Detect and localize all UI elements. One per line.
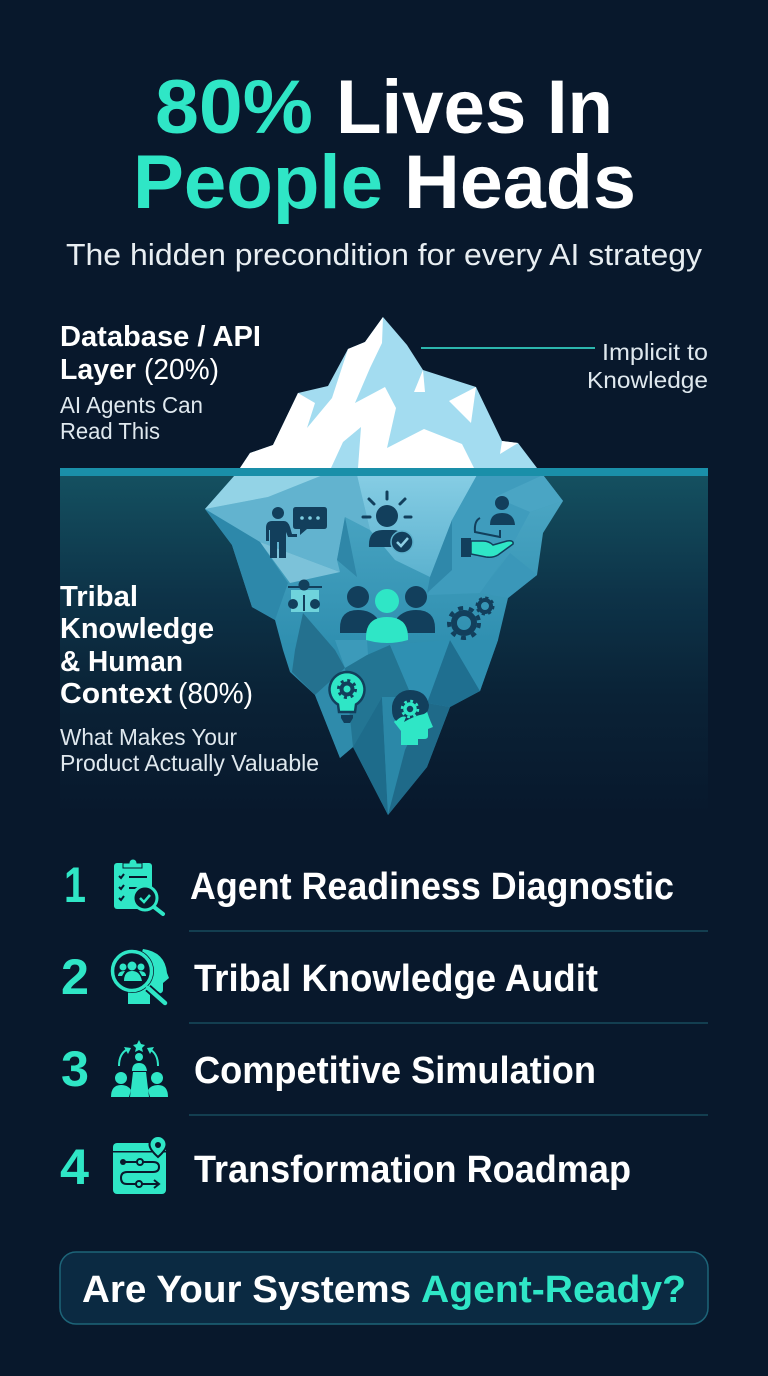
call to action: Are Your Systems	[82, 1269, 411, 1311]
icon: hand with person	[461, 496, 515, 557]
icon: people with star and arrows	[111, 1040, 168, 1097]
label: database / API layer: (20%)	[144, 354, 219, 386]
label: tribal knowledge: Context	[60, 678, 172, 710]
title: Lives In	[336, 65, 613, 150]
step 4: transformation roadmap	[60, 1136, 631, 1195]
label: database / API layer: Database / API	[60, 321, 261, 353]
iceberg above water	[240, 317, 537, 468]
callout: implicit to knowledge	[421, 339, 708, 393]
label: database / API layer	[60, 321, 261, 444]
step 2: tribal knowledge audit: 2	[61, 949, 89, 1005]
title: Heads	[404, 140, 636, 225]
step 4: transformation roadmap: 4	[60, 1139, 89, 1195]
waterline	[60, 468, 708, 476]
icon: person with speech bubble	[266, 507, 327, 558]
callout: implicit to knowledge: Knowledge	[587, 367, 708, 393]
step 3: competitive simulation: Competitive Simulation	[194, 1050, 596, 1092]
label: tribal knowledge: Tribal	[60, 581, 138, 613]
icon: clipboard with magnifier	[114, 859, 163, 914]
icon: small emblem	[288, 580, 322, 612]
iceberg below water	[205, 475, 563, 815]
label: tribal knowledge: & Human	[60, 646, 183, 678]
step 2: tribal knowledge audit	[61, 949, 598, 1005]
step 1: agent readiness diagnostic	[64, 857, 674, 914]
title: 80%	[155, 65, 313, 150]
label: tribal knowledge: Knowledge	[60, 613, 214, 645]
subtitle: The hidden precondition for every AI strategy	[66, 237, 703, 272]
label: database / API layer: Read This	[60, 418, 160, 444]
icon: gears	[449, 598, 494, 638]
title: People	[133, 140, 383, 225]
label: tribal knowledge: (80%)	[178, 678, 253, 710]
icon: head with magnifier	[110, 949, 169, 1004]
icon: lightbulb with gear	[330, 672, 364, 723]
title	[133, 65, 636, 225]
icon: roadmap with pin	[113, 1136, 166, 1194]
label: database / API layer: AI Agents Can	[60, 392, 203, 418]
step 3: competitive simulation	[61, 1040, 596, 1097]
call to action: Agent-Ready?	[421, 1269, 686, 1311]
step 4: transformation roadmap: Transformation Roadmap	[194, 1149, 631, 1191]
step 3: competitive simulation: 3	[61, 1041, 89, 1097]
callout: implicit to knowledge: Implicit to	[602, 339, 708, 365]
step 1: agent readiness diagnostic: 1	[64, 857, 86, 913]
label: tribal knowledge: Product Actually Valuable	[60, 750, 319, 776]
icon: central people group	[340, 586, 435, 643]
panel: underwater background	[60, 476, 708, 816]
step 2: tribal knowledge audit: Tribal Knowledge Audit	[194, 958, 598, 1000]
icon: head with gear	[392, 690, 433, 745]
label: tribal knowledge: What Makes Your	[60, 724, 237, 750]
call to action	[60, 1252, 708, 1324]
step 1: agent readiness diagnostic: Agent Readiness Diagnostic	[190, 866, 674, 908]
icon: sun person with check	[363, 492, 413, 553]
label: tribal knowledge	[60, 581, 319, 776]
label: database / API layer: Layer	[60, 354, 136, 386]
